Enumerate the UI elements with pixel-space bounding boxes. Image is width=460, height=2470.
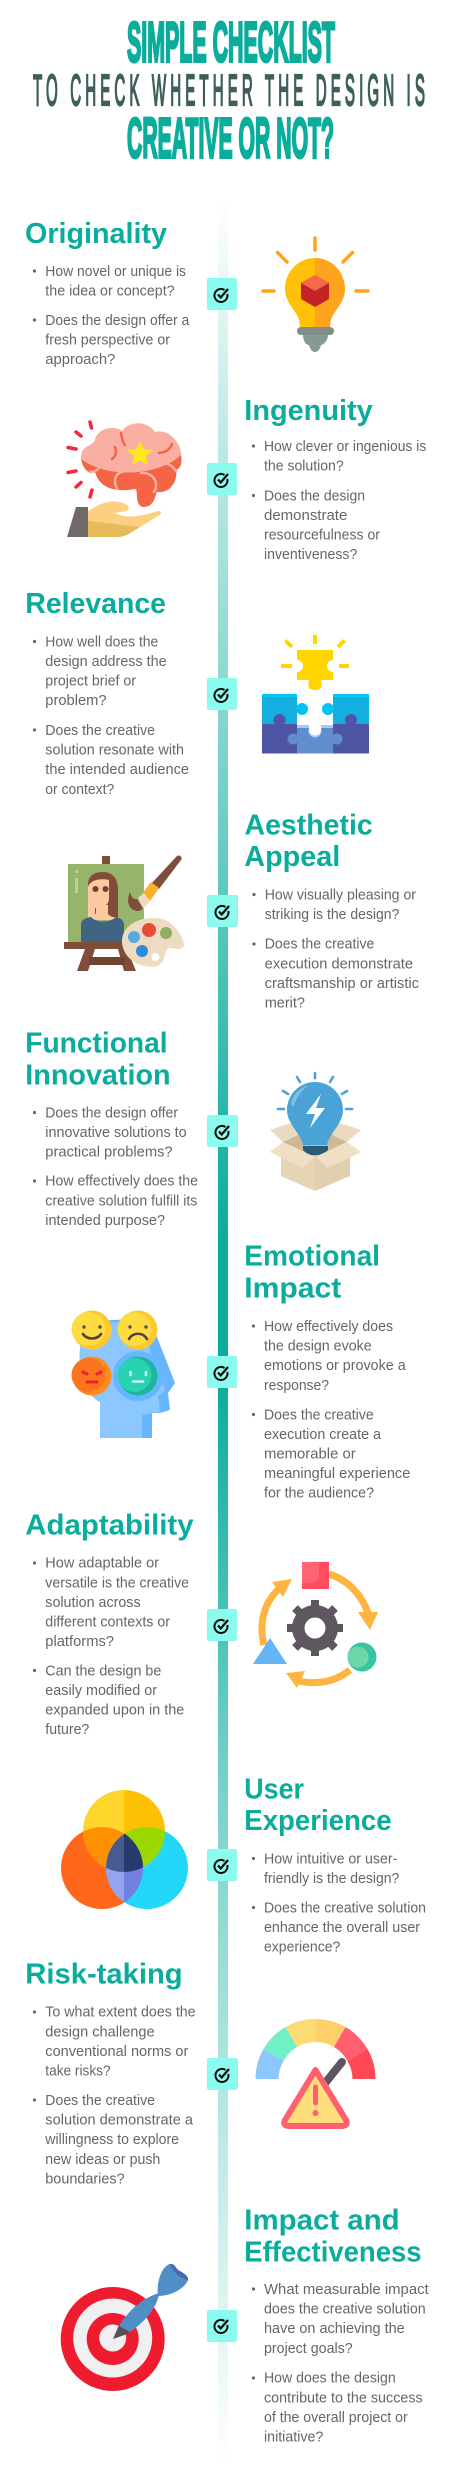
panel: emotional impact: execution create a: [264, 1427, 382, 1443]
panel: relevance: How well does the: [45, 634, 158, 650]
panel: adaptability: different contexts or: [45, 1614, 170, 1630]
panel: relevance: or context?: [45, 782, 114, 798]
panel: emotional impact: the design evoke: [264, 1339, 372, 1355]
panel: relevance: the intended audience: [45, 762, 189, 778]
panel: aesthetic appeal: craftsmanship or artistic: [265, 976, 419, 992]
panel: aesthetic appeal: Does the creative: [265, 937, 374, 953]
panel: aesthetic appeal: Aesthetic: [244, 809, 373, 841]
panel: originality: fresh perspective or: [45, 332, 170, 348]
panel: risk-taking: [25, 1959, 196, 2187]
panel: risk-taking: willingness to explore: [44, 2132, 179, 2148]
icon: adaptation cycle with gear: [253, 1562, 378, 1688]
panel: emotional impact: memorable or: [264, 1446, 356, 1462]
panel: originality: approach?: [45, 352, 115, 368]
panel: originality: Does the design offer a: [45, 313, 190, 329]
panel: ingenuity: Does the design: [264, 488, 365, 504]
panel: risk-taking: conventional norms or: [45, 2044, 188, 2060]
panel: relevance: design address the: [45, 654, 167, 670]
panel: relevance: solution resonate with: [45, 743, 184, 759]
panel: impact and effectiveness: contribute to the success: [264, 2390, 423, 2406]
panel: functional innovation: innovative solutions to: [45, 1125, 187, 1141]
panel: relevance: problem?: [45, 693, 107, 709]
panel: risk-taking: Risk-taking: [25, 1959, 183, 1991]
panel: risk-taking: take risks?: [45, 2064, 111, 2080]
panel: ingenuity: [244, 395, 426, 563]
panel: ingenuity: Ingenuity: [244, 395, 373, 427]
panel: relevance: [25, 588, 189, 798]
panel: functional innovation: [25, 1027, 198, 1229]
panel: relevance: Relevance: [25, 588, 166, 620]
panel: user experience: experience?: [264, 1940, 340, 1956]
panel: originality: Originality: [25, 218, 167, 250]
icon: risk gauge with warning: [255, 2019, 376, 2126]
panel: user experience: enhance the overall user: [264, 1920, 420, 1936]
panel: risk-taking: new ideas or push: [45, 2152, 160, 2168]
icon: light bulb with cube: [263, 238, 368, 352]
panel: functional innovation: Innovation: [25, 1059, 171, 1091]
panel: ingenuity: the solution?: [264, 459, 344, 475]
panel: impact and effectiveness: initiative?: [264, 2430, 323, 2446]
panel: aesthetic appeal: How visually pleasing or: [265, 887, 416, 903]
panel: user experience: Does the creative solution: [264, 1900, 426, 1916]
panel: aesthetic appeal: [244, 809, 419, 1012]
panel: impact and effectiveness: [244, 2204, 429, 2446]
panel: emotional impact: Impact: [244, 1272, 342, 1304]
panel: adaptability: future?: [45, 1722, 89, 1738]
panel: originality: [25, 218, 190, 368]
icon: head with emotion faces: [72, 1310, 175, 1438]
panel: adaptability: expanded upon in the: [45, 1703, 184, 1719]
icon: venn diagram: [61, 1788, 188, 1910]
panel: adaptability: How adaptable or: [45, 1556, 159, 1572]
panel: functional innovation: intended purpose?: [45, 1213, 165, 1229]
panel: emotional impact: [244, 1240, 410, 1502]
panel: originality: How novel or unique is: [45, 264, 186, 280]
panel: aesthetic appeal: merit?: [265, 996, 305, 1012]
panel: emotional impact: emotions or provoke a: [264, 1358, 407, 1374]
panel: functional innovation: Does the design offer: [45, 1105, 178, 1121]
icon: brain and hand: [67, 422, 181, 537]
panel: adaptability: Can the design be: [45, 1663, 161, 1679]
panel: emotional impact: meaningful experience: [264, 1466, 410, 1482]
panel: user experience: [244, 1773, 426, 1956]
panel: emotional impact: Does the creative: [264, 1407, 374, 1423]
panel: impact and effectiveness: Impact and: [244, 2204, 400, 2236]
icon: easel and palette: [64, 855, 184, 971]
panel: impact and effectiveness: does the creative solution: [264, 2302, 426, 2318]
panel: ingenuity: How clever or ingenious is: [264, 439, 426, 455]
panel: user experience: How intuitive or user-: [264, 1851, 397, 1867]
panel: emotional impact: How effectively does: [264, 1319, 393, 1335]
panel: adaptability: Adaptability: [25, 1509, 194, 1541]
panel: adaptability: platforms?: [45, 1634, 114, 1650]
panel: originality: the idea or concept?: [45, 284, 175, 300]
panel: ingenuity: demonstrate: [264, 508, 347, 524]
panel: risk-taking: Does the creative: [45, 2093, 155, 2109]
panel: adaptability: solution across: [45, 1595, 141, 1611]
panel: risk-taking: design challenge: [45, 2024, 155, 2040]
icon: puzzle: [262, 635, 369, 754]
panel: risk-taking: To what extent does the: [45, 2005, 196, 2021]
panel: relevance: Does the creative: [45, 723, 155, 739]
panel: user experience: Experience: [244, 1805, 392, 1837]
panel: functional innovation: Functional: [25, 1027, 168, 1059]
panel: emotional impact: for the audience?: [264, 1486, 374, 1502]
panel: adaptability: easily modified or: [45, 1683, 157, 1699]
panel: risk-taking: boundaries?: [45, 2171, 125, 2187]
panel: aesthetic appeal: Appeal: [244, 841, 340, 873]
panel: risk-taking: solution demonstrate a: [45, 2113, 194, 2129]
panel: impact and effectiveness: How does the design: [264, 2371, 396, 2387]
checkbox markers: [207, 278, 238, 2342]
panel: impact and effectiveness: Effectiveness: [244, 2236, 422, 2268]
panel: impact and effectiveness: project goals?: [264, 2341, 353, 2357]
panel: ingenuity: inventiveness?: [264, 547, 357, 563]
icon: target with dart: [61, 2264, 188, 2391]
panel: user experience: friendly is the design?: [264, 1871, 399, 1887]
panel: user experience: User: [244, 1773, 304, 1805]
panel: relevance: project brief or: [45, 674, 136, 690]
panel: ingenuity: resourcefulness or: [264, 528, 380, 544]
panel: functional innovation: creative solution fulfill its: [45, 1193, 197, 1209]
panel: functional innovation: practical problems?: [45, 1144, 173, 1160]
panel: adaptability: [25, 1509, 194, 1738]
icon: bulb in box: [270, 1073, 361, 1191]
panel: functional innovation: How effectively does the: [45, 1174, 198, 1190]
panel: impact and effectiveness: What measurable impact: [264, 2282, 429, 2298]
timeline bar: [218, 200, 228, 2465]
panel: aesthetic appeal: striking is the design?: [265, 907, 399, 923]
panel: impact and effectiveness: have on achieving the: [264, 2321, 405, 2337]
panel: adaptability: versatile is the creative: [45, 1575, 189, 1591]
panel: emotional impact: response?: [264, 1378, 329, 1394]
panel: emotional impact: Emotional: [244, 1240, 380, 1272]
panel: impact and effectiveness: of the overall project or: [264, 2410, 408, 2426]
title: [33, 10, 429, 170]
panel: aesthetic appeal: execution demonstrate: [265, 956, 413, 972]
